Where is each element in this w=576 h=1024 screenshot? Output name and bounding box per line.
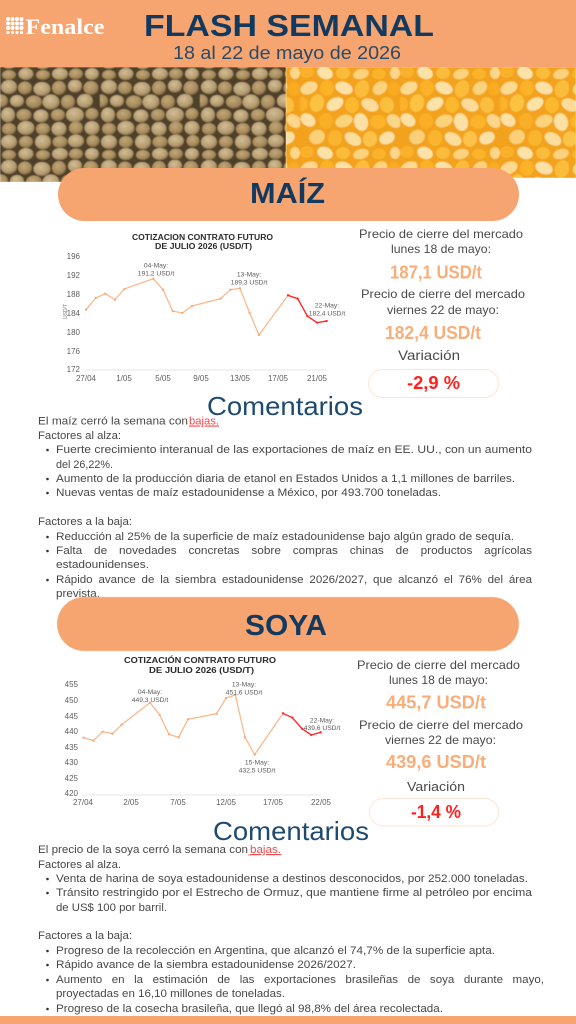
price panel: soya: viernes 22 de mayo: <box>385 733 496 747</box>
text block: maíz comments: Reducción al 25% de la superficie de maíz estadounidense bajo algún grado de sequía. <box>56 531 514 543</box>
price panel: maíz: Precio de cierre del mercado <box>359 227 523 241</box>
y axis labels: 192 <box>67 271 81 280</box>
chart title: DE JULIO 2026 (USD/T) <box>149 666 254 675</box>
annotations: 15-May: <box>245 760 269 766</box>
text block: maíz comments: Aumento de la producción diaria de etanol en Estados Unidos a 1,1 millones de barriles. <box>56 473 515 485</box>
annotations: 191,2 USD/t <box>138 270 174 278</box>
text block: maíz comments: Rápido avance de la siembra estadounidense 2026/2027, que alcanzó el 76% del área <box>56 574 533 586</box>
price panel: maíz: -2,9 % <box>407 373 460 393</box>
text block: maíz comments: Factores a la baja: <box>38 516 132 528</box>
annotations <box>132 682 340 774</box>
text block: maíz comments: El maíz cerró la semana con <box>38 416 188 428</box>
section banner: MAÍZ: MAÍZ <box>250 176 325 210</box>
text block: soya comments: Factores a la baja: <box>38 930 132 942</box>
price panel: soya: Precio de cierre del mercado <box>359 718 523 732</box>
price panel: soya: 439,6 USD/t <box>386 752 486 772</box>
x axis labels: 27/04 <box>73 798 94 807</box>
x axis labels: 27/04 <box>76 374 97 383</box>
annotations: 189,3 USD/t <box>231 280 267 286</box>
annotations: 449,3 USD/t <box>132 697 168 704</box>
price panel: soya <box>357 658 523 826</box>
annotations: 22-May: <box>310 718 334 724</box>
text block: soya comments: Rápido avance de la siembra estadounidense 2026/2027. <box>56 959 356 971</box>
heading: Comentarios soya: Comentarios <box>213 816 369 846</box>
text block: soya comments: bajas. <box>250 844 281 856</box>
text block: maíz comments: del 26,22%. <box>56 459 113 471</box>
chart title: DE JULIO 2026 (USD/T) <box>155 242 252 251</box>
logo: Fenalce: Fenalce <box>26 14 105 39</box>
price panel: maíz <box>359 227 525 398</box>
chart title: COTIZACION CONTRATO FUTURO <box>132 233 273 242</box>
price panel: soya: Precio de cierre del mercado <box>357 658 520 672</box>
text block: maíz comments: Falta de novedades concretas sobre compras chinas de productos agrícolas <box>56 545 533 557</box>
text block: soya comments: Venta de harina de soya estadounidense a destinos desconocidos, por 252.000 toneladas. <box>56 873 528 885</box>
price line <box>85 277 328 336</box>
price panel: maíz: lunes 18 de mayo: <box>391 242 491 256</box>
text block: soya comments: Progreso de la cosecha brasileña, que llegó al 98,8% del área recolectada. <box>56 1003 443 1015</box>
chart title <box>124 656 276 675</box>
y axis labels: 440 <box>65 727 79 736</box>
y axis labels: 425 <box>65 774 79 783</box>
annotations: 182,4 USD/t <box>309 310 345 318</box>
x axis labels: 17/05 <box>268 374 289 383</box>
chart: maíz futures: USD/T <box>63 304 69 319</box>
section banner: SOYA: SOYA <box>245 610 327 642</box>
x axis labels: 2/05 <box>123 798 139 807</box>
price panel: maíz: 187,1 USD/t <box>390 262 482 282</box>
text block: maíz comments: estadounidenses. <box>56 559 149 571</box>
heading: Comentarios maíz: Comentarios <box>207 391 363 421</box>
annotations: 04-May: <box>144 262 168 270</box>
date subtitle: 18 al 22 de mayo de 2026 <box>173 43 401 63</box>
x axis labels: 9/05 <box>193 374 209 383</box>
x axis labels: 17/05 <box>263 798 284 807</box>
text block: maíz comments: bajas. <box>189 416 219 428</box>
text block: maíz comments: Nuevas ventas de maíz estadounidense a México, por 493.700 toneladas. <box>56 487 441 499</box>
price panel: maíz: Variación <box>398 347 460 363</box>
text block: soya comments: El precio de la soya cerró la semana con <box>38 844 248 856</box>
text block: maíz comments: prevista. <box>56 588 100 600</box>
text block: soya comments: de US$ 100 por barril. <box>56 902 167 914</box>
text block: maíz comments <box>38 416 533 600</box>
price panel: soya: -1,4 % <box>411 802 461 822</box>
y axis labels: 435 <box>65 743 79 752</box>
y axis labels: 176 <box>67 347 81 356</box>
x axis labels <box>73 798 332 807</box>
section banner: SOYA <box>57 597 519 651</box>
text block: soya comments: Tránsito restringido por el Estrecho de Ormuz, que mantiene firme al petróleo por encima <box>56 887 533 899</box>
annotations: 22-May: <box>315 302 339 310</box>
text block: soya comments: Factores al alza. <box>38 859 121 871</box>
annotations: 451,6 USD/t <box>226 690 262 696</box>
photo: soybeans <box>0 67 286 182</box>
x axis labels <box>76 374 328 383</box>
x axis labels: 12/05 <box>216 798 237 807</box>
price panel: maíz: 182,4 USD/t <box>385 323 481 343</box>
annotations: 13-May: <box>237 272 261 278</box>
header band <box>0 0 576 67</box>
y axis labels: 188 <box>67 290 81 299</box>
text block: maíz comments: Fuerte crecimiento interanual de las exportaciones de maíz en EE. UU., con un aumento <box>56 444 532 456</box>
y axis labels <box>65 680 79 798</box>
annotations: 13-May: <box>232 682 256 688</box>
y axis labels: 420 <box>65 789 79 798</box>
price line <box>82 694 322 756</box>
footer bar <box>0 1016 576 1024</box>
price panel: soya: lunes 18 de mayo: <box>389 673 488 687</box>
text block: soya comments: Progreso de la recolección en Argentina, que alcanzó el 74,7% de la superficie apta. <box>56 945 495 957</box>
x axis labels: 21/05 <box>307 374 328 383</box>
x axis labels: 5/05 <box>155 374 171 383</box>
y axis labels: 172 <box>67 365 81 374</box>
y axis labels: 180 <box>67 328 81 337</box>
chart: maíz futures <box>63 233 345 383</box>
x axis labels: 13/05 <box>230 374 251 383</box>
text block: soya comments: Aumento en la estimación de las exportaciones brasileñas de soya durante mayo, <box>56 974 544 986</box>
price panel: maíz: viernes 22 de mayo: <box>387 303 499 317</box>
annotations: 432,5 USD/t <box>239 768 275 774</box>
text block: maíz comments: Factores al alza: <box>38 430 121 442</box>
price panel: soya: Variación <box>407 779 465 794</box>
y axis labels: 196 <box>67 252 81 261</box>
y axis labels: 450 <box>65 696 79 705</box>
x axis labels: 1/05 <box>116 374 132 383</box>
chart title <box>132 233 273 251</box>
chart: soya futures <box>65 656 340 807</box>
annotations: 439,6 USD/t <box>304 725 340 732</box>
x axis labels: 22/05 <box>311 798 332 807</box>
title: FLASH SEMANAL <box>144 8 434 43</box>
x axis labels: 7/05 <box>170 798 186 807</box>
text block: soya comments <box>38 844 544 1015</box>
y axis labels <box>67 252 81 374</box>
photo: corn <box>286 67 576 178</box>
section banner: MAÍZ <box>58 168 519 221</box>
price panel: soya: 445,7 USD/t <box>386 692 486 712</box>
price panel: maíz: Precio de cierre del mercado <box>361 287 525 301</box>
y axis labels: 445 <box>65 712 79 721</box>
y axis labels: 455 <box>65 680 79 689</box>
annotations <box>138 262 345 318</box>
chart title: COTIZACIÓN CONTRATO FUTURO <box>124 656 276 665</box>
y axis labels: 184 <box>67 309 81 318</box>
text block: soya comments: proyectadas en 16,10 millones de toneladas. <box>56 988 285 1000</box>
annotations: 04-May: <box>138 689 162 696</box>
y axis labels: 430 <box>65 758 79 767</box>
